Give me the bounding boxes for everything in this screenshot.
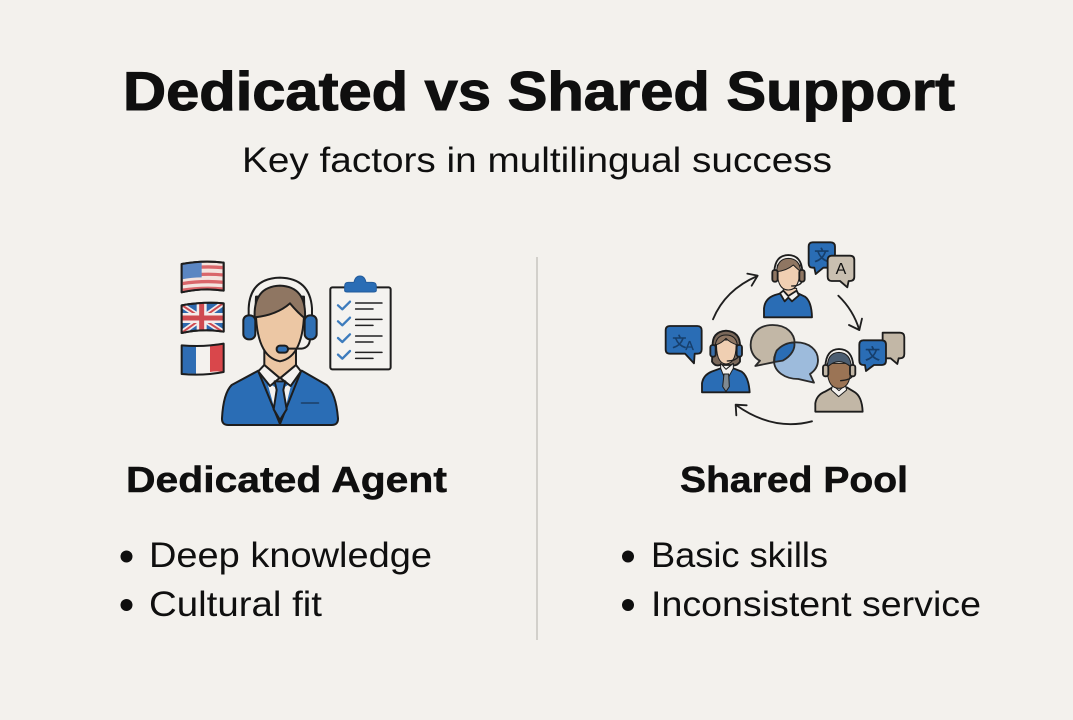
panel: shared pool [622, 242, 981, 624]
arrow: right to left [736, 405, 812, 424]
icon: dedicated agent illustration [178, 262, 391, 425]
icon: translate bubbles right: 文 [865, 343, 880, 364]
bullet list: dedicated agent: Cultural fit [149, 585, 322, 624]
icon: translate bubbles top: 文 [814, 244, 829, 265]
icon: translate bubble left: A [685, 339, 694, 353]
icon: agent with headset [222, 278, 338, 425]
bullet list: dedicated agent: Deep knowledge [149, 536, 432, 575]
bullet list: shared pool: Inconsistent service [651, 585, 981, 624]
icon: US flag [182, 262, 224, 292]
title: Dedicated vs Shared Support [123, 60, 955, 122]
bullet list: shared pool: Basic skills [651, 536, 828, 575]
divider [536, 257, 538, 640]
bullet list: shared pool [622, 536, 981, 624]
subtitle: Key factors in multilingual success [242, 140, 832, 180]
heading: shared pool: Shared Pool [680, 459, 908, 500]
icon: right agent [815, 349, 863, 412]
icon: left agent [702, 331, 750, 392]
arrow: left to top [713, 274, 758, 319]
bullet list: dedicated agent [120, 536, 432, 624]
icon: translate bubbles top [809, 242, 854, 287]
icon: clipboard checklist [330, 276, 391, 369]
icon: shared pool illustration [666, 242, 904, 424]
icon: translate bubble left: 文 [672, 332, 686, 352]
icon: central speech bubbles [751, 325, 818, 383]
heading: dedicated agent: Dedicated Agent [126, 459, 447, 500]
icon: French flag [182, 344, 224, 375]
arrow: top to right [838, 296, 862, 330]
icon: translate bubble left [666, 326, 702, 363]
panel: dedicated agent [120, 262, 447, 624]
icon: UK flag [180, 302, 225, 334]
icon: translate bubbles right [859, 333, 904, 371]
icon: top agent [764, 255, 812, 317]
icon: translate bubbles top: A [836, 261, 847, 278]
